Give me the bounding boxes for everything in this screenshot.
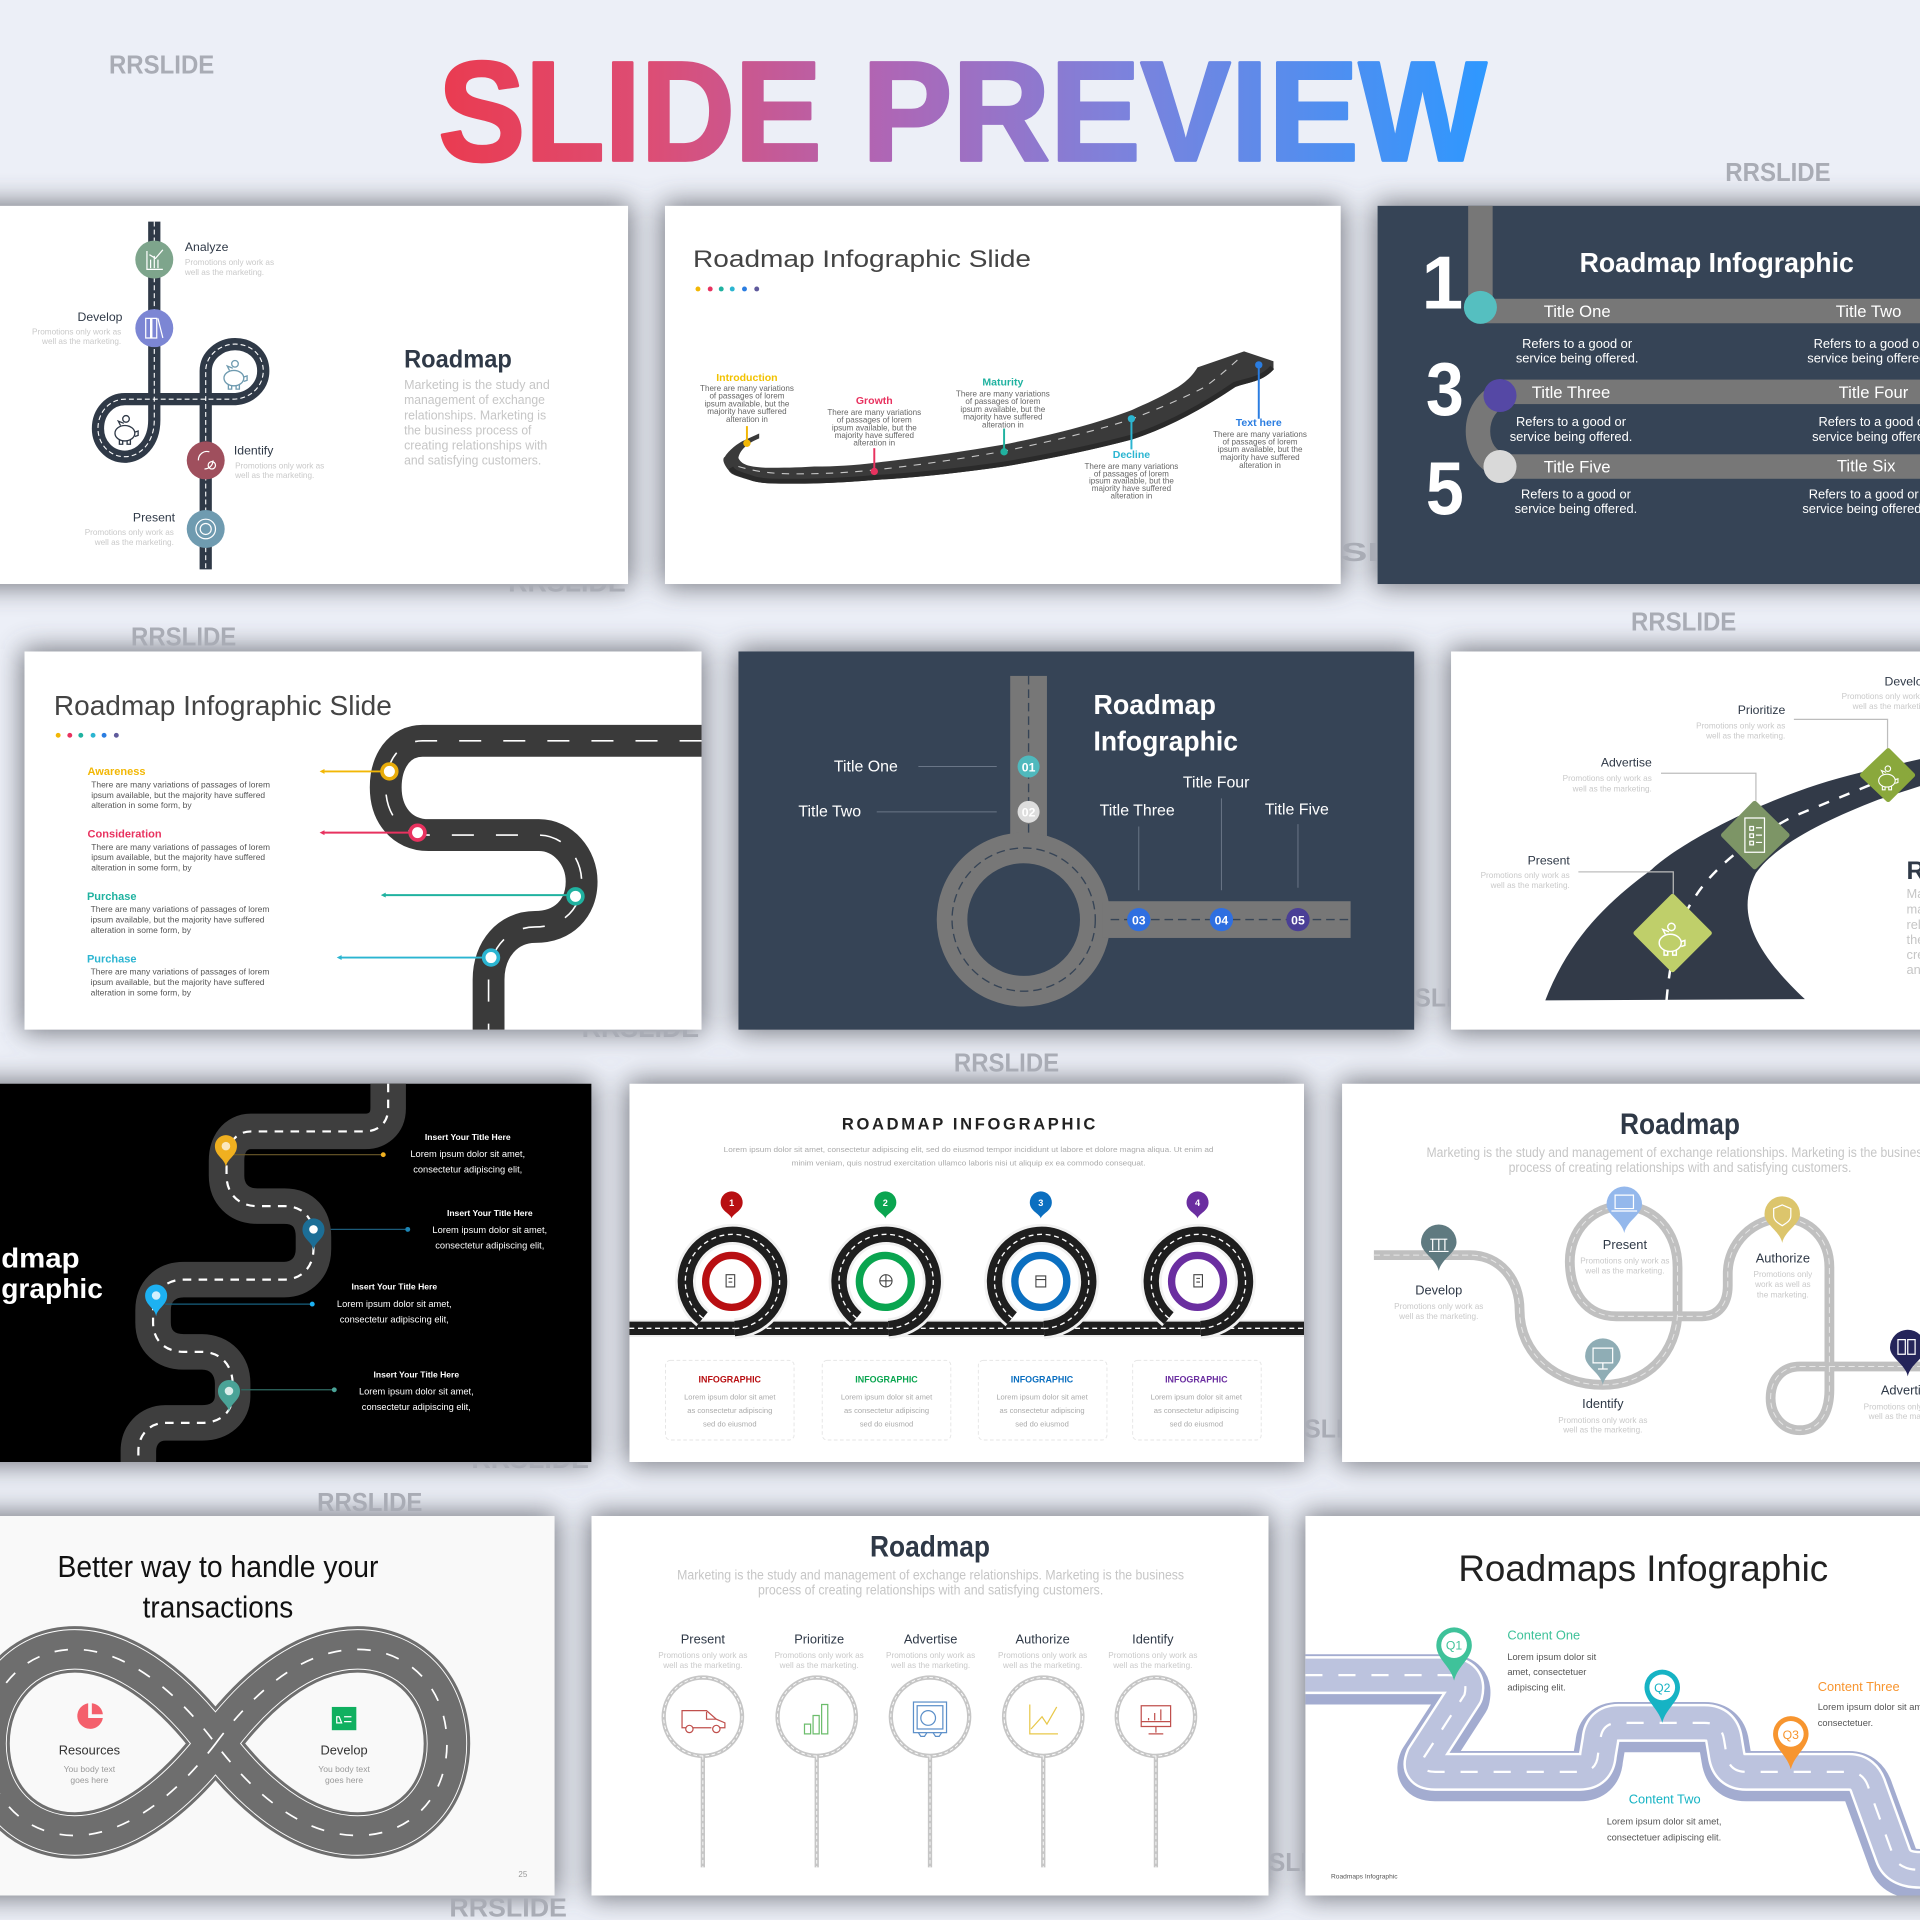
heading: Roadmap Infographic — [1580, 247, 1854, 278]
dashed boxes — [666, 1360, 1261, 1440]
icon: chart — [1030, 1704, 1058, 1734]
dots — [56, 733, 119, 738]
numbers: 5 — [1426, 446, 1464, 530]
infinity road — [0, 1649, 447, 1836]
heading: Roadmap — [870, 1530, 990, 1563]
items: There are many variations of passages of lorem — [91, 904, 269, 914]
labels: Promotions only work as — [998, 1651, 1087, 1660]
callouts: ipsum available, but the — [705, 400, 790, 409]
labels: Title Four — [1183, 774, 1250, 791]
box text: INFOGRAPHIC — [855, 1374, 918, 1384]
heading: Roadmaps Infographic — [1458, 1548, 1828, 1589]
text blocks: Lorem ipsum dolor sit amet, — [1607, 1816, 1721, 1826]
labels: well as the marketing. — [1002, 1661, 1082, 1670]
pin Q1: Q1 — [1446, 1638, 1462, 1652]
road bars — [1468, 206, 1920, 479]
heading: Roadmap — [1620, 1108, 1740, 1141]
labels: Promotions only work as — [235, 461, 324, 470]
intro: Marketing is the study and management of exchange relationships. Marketing is the business — [677, 1568, 1184, 1583]
pins — [145, 1135, 324, 1412]
text: consectetur adipiscing elit, — [413, 1164, 522, 1174]
labels: Refers to a good or — [1809, 486, 1919, 501]
callouts: Decline — [1113, 449, 1150, 461]
labels: Develop — [321, 1743, 368, 1758]
labels: Advertise — [1601, 756, 1652, 770]
labels: Identify — [1582, 1396, 1624, 1411]
text: consectetur adipiscing elit, — [435, 1240, 544, 1250]
text block: and satisfying customers. — [404, 453, 541, 468]
text: consectetur adipiscing elit, — [340, 1314, 449, 1324]
text blocks: adipiscing elit. — [1507, 1682, 1566, 1692]
callouts — [700, 372, 1307, 500]
labels: service being offered. — [1510, 429, 1632, 444]
callouts: of passages of lorem — [1094, 469, 1169, 478]
labels: Title Three — [1532, 383, 1610, 402]
intro: Lorem ipsum dolor sit amet, consectetur adipiscing elit, sed do eiusmod tempor incididunt ut labore et dolore magna aliqua. Ut enim ad — [724, 1145, 1213, 1154]
numbers: 3 — [1426, 347, 1464, 431]
labels: well as the marketing. — [1562, 1426, 1642, 1435]
callouts: majority have suffered — [963, 412, 1043, 421]
markers — [743, 361, 1262, 475]
items: alteration in some form, by — [91, 863, 192, 873]
icon: present marker — [187, 510, 225, 548]
labels: well as the marketing. — [1490, 881, 1570, 890]
labels: Prioritize — [794, 1631, 844, 1646]
panel: roadmap vertical loops — [0, 206, 628, 584]
dots — [696, 287, 759, 291]
panel: grey curving road — [1342, 1084, 1920, 1462]
labels: Promotions only work as — [1696, 722, 1785, 731]
watermarks: SLIDE — [1269, 1849, 1342, 1877]
number pins — [721, 1191, 1209, 1218]
labels: Advertise — [904, 1631, 957, 1646]
labels: Promotions only work as — [32, 327, 121, 336]
items — [87, 766, 270, 998]
text blocks: Content Two — [1629, 1792, 1701, 1807]
callouts: ipsum available, but the — [832, 423, 917, 432]
heading: Infographic — [1093, 726, 1238, 757]
lollipops — [664, 1678, 1195, 1867]
labels: Title One — [1544, 302, 1611, 321]
callouts: of passages of lorem — [965, 397, 1041, 406]
heading: Better way to handle your — [58, 1550, 378, 1584]
labels — [1481, 675, 1920, 890]
labels: service being offered. — [1515, 501, 1637, 516]
callouts: Introduction — [716, 372, 778, 384]
road — [386, 741, 702, 1030]
items: Purchase — [87, 891, 137, 903]
labels: Title Two — [1836, 302, 1901, 321]
labels — [798, 758, 1329, 821]
icon: monitor — [1141, 1706, 1171, 1734]
stops: 04 — [1215, 913, 1228, 927]
labels: Promotions only work as — [1481, 871, 1570, 880]
box text: as consectetur adipiscing — [687, 1406, 772, 1415]
heading — [58, 1550, 378, 1625]
text: Lorem ipsum dolor sit amet, — [410, 1149, 525, 1159]
labels: Present — [1603, 1237, 1647, 1252]
watermarks: RRSLIDE — [131, 623, 236, 651]
labels: work as well as — [1754, 1280, 1811, 1289]
labels: Title Four — [1839, 383, 1909, 402]
title: SLIDE — [438, 32, 822, 191]
watermarks: RRSLIDE — [1631, 609, 1736, 637]
title: PREVIEW — [862, 32, 1487, 191]
pin Q2: Q2 — [1654, 1681, 1671, 1695]
panel: infinity road — [0, 1516, 555, 1896]
labels: You body text — [318, 1764, 370, 1774]
labels: Refers to a good or — [1516, 414, 1627, 429]
stops: 02 — [1022, 806, 1036, 820]
labels: Promotions only work as — [886, 1651, 975, 1660]
text blocks: Roadmaps Infographic — [1331, 1873, 1398, 1880]
callouts: Text here — [1236, 417, 1282, 429]
icon: van — [682, 1711, 725, 1733]
box text: as consectetur adipiscing — [999, 1406, 1085, 1415]
icon: develop marker — [135, 309, 173, 347]
labels: Promotions only work as — [1580, 1257, 1669, 1266]
text: dmap — [1, 1242, 80, 1273]
labels: well as the marketing. — [41, 337, 121, 346]
text blocks: Content Three — [1818, 1679, 1900, 1694]
labels: Promotions only work as — [1563, 774, 1652, 783]
items: Purchase — [87, 953, 137, 965]
labels: Present — [681, 1631, 725, 1646]
panel: black winding road — [0, 1084, 591, 1462]
callouts: alteration in — [853, 439, 895, 448]
callouts: alteration in — [726, 415, 768, 424]
callouts: majority have suffered — [1092, 484, 1171, 493]
panel: loop roads — [629, 1084, 1304, 1462]
icon: green card — [332, 1707, 356, 1730]
road — [1305, 1675, 1920, 1874]
labels — [1394, 1237, 1920, 1435]
labels: Promotions only work as — [775, 1651, 864, 1660]
curved road — [723, 351, 1273, 484]
watermarks: RRSLIDE — [582, 1015, 699, 1043]
text: Insert Your Title Here — [373, 1370, 459, 1380]
callouts: There are many variations — [956, 390, 1050, 399]
number pins: 3 — [1038, 1198, 1043, 1208]
items: alteration in some form, by — [91, 925, 192, 935]
box text: sed do eiusmod — [1170, 1420, 1223, 1429]
callouts: majority have suffered — [707, 407, 787, 416]
labels: Promotions only work as — [185, 258, 274, 267]
labels: Develop — [1415, 1282, 1462, 1297]
text: Lorem ipsum dolor sit amet, — [359, 1387, 474, 1397]
stops: 01 — [1022, 760, 1036, 774]
box text — [684, 1374, 1243, 1429]
box text: INFOGRAPHIC — [699, 1374, 762, 1384]
panel: winding road slide — [24, 651, 702, 1030]
labels: Resources — [59, 1743, 120, 1758]
pin Q3 — [1773, 1716, 1809, 1769]
labels: well as the marketing. — [662, 1661, 742, 1670]
labels: the marketing. — [1757, 1290, 1809, 1299]
box text: INFOGRAPHIC — [1165, 1374, 1228, 1384]
box text: INFOGRAPHIC — [1011, 1374, 1074, 1384]
labels: Identify — [1132, 1631, 1174, 1646]
labels: Refers to a good or — [1521, 486, 1632, 501]
watermarks: RRSLIDE — [471, 1446, 589, 1474]
labels: well as the marketing. — [94, 538, 174, 547]
heading: Roadmap — [1093, 689, 1216, 720]
text block: Roadmap — [404, 345, 512, 373]
labels: Promotions only work as — [85, 528, 174, 537]
items: There are many variations of passages of lorem — [91, 842, 270, 852]
labels: Analyze — [185, 240, 229, 254]
callouts: ipsum available, but the — [1218, 445, 1303, 454]
watermarks: SLIDE — [1341, 539, 1458, 567]
callouts: ipsum available, but the — [960, 405, 1046, 414]
callouts: of passages of lorem — [709, 392, 785, 401]
text blocks — [1331, 1628, 1920, 1880]
watermarks: RRSLIDE — [508, 569, 626, 597]
text: Insert Your Title Here — [351, 1281, 437, 1291]
labels: Title Five — [1265, 801, 1329, 818]
callouts: There are many variations — [827, 408, 921, 417]
connectors — [1578, 719, 1888, 894]
callouts: alteration in — [1239, 461, 1281, 470]
stops: 05 — [1291, 913, 1305, 927]
heading: Roadmap Infographic Slide — [54, 690, 392, 721]
labels: well as the marketing. — [234, 471, 314, 480]
coloured rings — [706, 1255, 1224, 1307]
callouts: ipsum available, but the — [1089, 477, 1174, 486]
callouts: alteration in — [1111, 491, 1152, 500]
labels: 25 — [518, 1870, 528, 1879]
callouts: There are many variations — [700, 384, 794, 393]
labels: Title Three — [1100, 803, 1175, 820]
ring icons — [726, 1275, 1202, 1287]
intro — [1427, 1145, 1920, 1175]
intro: process of creating relationships with and satisfying customers. — [758, 1582, 1103, 1597]
text: Insert Your Title Here — [425, 1132, 511, 1142]
text block: the business process of — [404, 423, 532, 438]
box text: sed do eiusmod — [1015, 1420, 1069, 1429]
text block — [1907, 857, 1920, 977]
heading: Roadmap Infographic Slide — [693, 246, 1031, 273]
box text: as consectetur adipiscing — [1154, 1406, 1239, 1415]
road — [98, 222, 263, 569]
labels: Title Six — [1837, 456, 1896, 475]
text block — [404, 345, 550, 468]
heading: transactions — [143, 1591, 293, 1625]
node dots — [1464, 291, 1517, 483]
labels: Refers to a good or — [1522, 336, 1633, 351]
text blocks: consectetuer. — [1818, 1718, 1873, 1728]
text block: relationships. Marketing is — [404, 407, 546, 422]
number pins: 2 — [883, 1198, 888, 1208]
labels: Present — [133, 511, 176, 525]
items: alteration in some form, by — [91, 800, 192, 810]
panel: dark numbered roadmap — [1378, 206, 1920, 584]
watermarks: SLIDE — [1414, 985, 1488, 1013]
icon: bars — [804, 1704, 828, 1734]
icon: pie — [77, 1703, 103, 1729]
watermarks: RRSLIDE — [317, 1489, 422, 1517]
labels: Authorize — [1756, 1250, 1810, 1265]
road — [1545, 759, 1920, 1000]
items: ipsum available, but the majority have suffered — [91, 915, 265, 925]
callouts: of passages of lorem — [1222, 437, 1298, 446]
box text: sed do eiusmod — [703, 1420, 757, 1429]
labels: Develop — [78, 310, 123, 324]
intro — [724, 1145, 1213, 1168]
labels: well as the marketing. — [779, 1661, 859, 1670]
panel: five lollipop stops — [591, 1516, 1269, 1896]
pins — [1421, 1187, 1920, 1385]
intro: minim veniam, quis nostrud exercitation ullamco laboris nisi ut aliquip ex ea commodo consequat. — [792, 1159, 1146, 1168]
items: alteration in some form, by — [91, 988, 192, 998]
markers — [382, 764, 583, 965]
box text: Lorem ipsum dolor sit amet — [841, 1393, 933, 1402]
labels — [1510, 302, 1920, 516]
leader lines — [877, 767, 1298, 890]
text: Insert Your Title Here — [447, 1208, 533, 1218]
text block: Marketing is the study and — [404, 377, 550, 392]
labels: Title One — [834, 758, 898, 775]
intro: process of creating relationships with and satisfying customers. — [1509, 1160, 1851, 1175]
text: Lorem ipsum dolor sit amet, — [337, 1299, 452, 1309]
heading — [1093, 689, 1238, 757]
callouts: majority have suffered — [1220, 453, 1300, 462]
labels: well as the marketing. — [1572, 785, 1652, 794]
panel: perspective road — [1451, 651, 1920, 1030]
box text: as consectetur adipiscing — [844, 1406, 929, 1415]
labels: Promotions only — [1753, 1270, 1813, 1279]
text: Lorem ipsum dolor sit amet, — [432, 1225, 547, 1235]
labels: Identify — [234, 443, 274, 457]
text blocks: Lorem ipsum dolor sit — [1507, 1652, 1597, 1662]
items: Awareness — [88, 766, 146, 778]
box text: sed do eiusmod — [860, 1420, 913, 1429]
callouts: There are many variations — [1085, 462, 1178, 471]
text blocks: consectetuer adipiscing elit. — [1607, 1832, 1721, 1842]
intro — [677, 1568, 1184, 1597]
labels: well as the marketing. — [890, 1661, 970, 1670]
labels: well as the marketing. — [1584, 1266, 1664, 1275]
road — [952, 676, 1351, 991]
text block: management of exchange — [404, 392, 545, 407]
labels: service being offered. — [1516, 350, 1638, 365]
callouts: Growth — [856, 395, 893, 407]
watermarks: SLIDE — [1304, 1416, 1378, 1444]
icon: analyze marker — [135, 241, 173, 279]
icons — [1659, 766, 1898, 955]
labels: Promotions only work as — [1108, 1651, 1197, 1660]
callouts: Maturity — [982, 377, 1023, 389]
items: There are many variations of passages of lorem — [91, 779, 270, 789]
labels: Title Two — [798, 804, 861, 821]
leaders — [165, 1152, 410, 1392]
labels: goes here — [325, 1775, 363, 1785]
watermarks: RRSLIDE — [109, 51, 214, 79]
text: consectetur adipiscing elit, — [362, 1402, 471, 1412]
items: ipsum available, but the majority have suffered — [91, 977, 265, 987]
labels — [658, 1631, 1197, 1670]
watermarks: RRSLIDE — [954, 1049, 1059, 1077]
labels: Present — [1528, 853, 1570, 867]
labels: well as the marketing. — [1112, 1661, 1192, 1670]
pin Q3: Q3 — [1783, 1728, 1799, 1742]
labels: Promotions only work as — [658, 1651, 747, 1660]
labels — [32, 240, 324, 547]
labels: well as the marketing. — [184, 268, 264, 277]
labels: Prioritize — [1738, 703, 1785, 717]
watermarks: RRSLIDE — [1725, 159, 1831, 187]
heading: ROADMAP INFOGRAPHIC — [842, 1115, 1095, 1134]
road — [138, 1084, 388, 1462]
labels: goes here — [70, 1775, 109, 1785]
labels: well as the marketing. — [1705, 731, 1785, 740]
items: ipsum available, but the majority have suffered — [91, 852, 265, 862]
box text: Lorem ipsum dolor sit amet — [996, 1393, 1089, 1402]
arrows — [320, 769, 567, 960]
numbers: 1 — [1422, 241, 1463, 325]
labels: Title Five — [1544, 458, 1611, 477]
text blocks: Content One — [1507, 1628, 1580, 1643]
callouts: alteration in — [982, 420, 1024, 429]
text — [1, 1132, 547, 1412]
text blocks: amet, consectetuer — [1507, 1667, 1586, 1677]
diamonds — [1636, 751, 1913, 970]
panel: curved road slide — [665, 206, 1341, 584]
number pins: 4 — [1195, 1198, 1201, 1208]
labels: You body text — [64, 1764, 116, 1774]
callouts: There are many variations — [1213, 430, 1307, 439]
labels — [59, 1743, 528, 1879]
labels: well as the marketing. — [1398, 1312, 1478, 1321]
pin Q2 — [1644, 1670, 1680, 1723]
items: Consideration — [88, 829, 162, 841]
road — [1374, 1206, 1920, 1430]
stops — [1018, 756, 1310, 931]
panel: dark roundabout — [738, 651, 1414, 1030]
items: There are many variations of passages of lorem — [91, 967, 269, 977]
labels: Authorize — [1016, 1631, 1070, 1646]
icon: piggy banks — [115, 360, 247, 444]
road dashes — [664, 1678, 1195, 1867]
pin Q1 — [1436, 1627, 1472, 1681]
icon: identify marker — [187, 441, 225, 479]
labels: Promotions only work as — [1394, 1302, 1483, 1311]
box text: Lorem ipsum dolor sit amet — [1151, 1393, 1243, 1402]
text: graphic — [1, 1273, 103, 1304]
callouts: of passages of lorem — [837, 415, 912, 424]
title — [438, 32, 1487, 191]
stops: 03 — [1132, 913, 1146, 927]
labels: Promotions only work as — [1558, 1416, 1647, 1425]
number pins: 1 — [729, 1198, 734, 1208]
panel: lilac road — [1305, 1516, 1920, 1896]
callouts: majority have suffered — [835, 431, 914, 440]
items: ipsum available, but the majority have suffered — [91, 790, 265, 800]
box text: Lorem ipsum dolor sit amet — [684, 1393, 776, 1402]
numbers — [1426, 256, 1462, 515]
icon: safe — [913, 1702, 947, 1736]
text block: creating relationships with — [404, 437, 547, 452]
road with loops — [629, 1234, 1304, 1329]
